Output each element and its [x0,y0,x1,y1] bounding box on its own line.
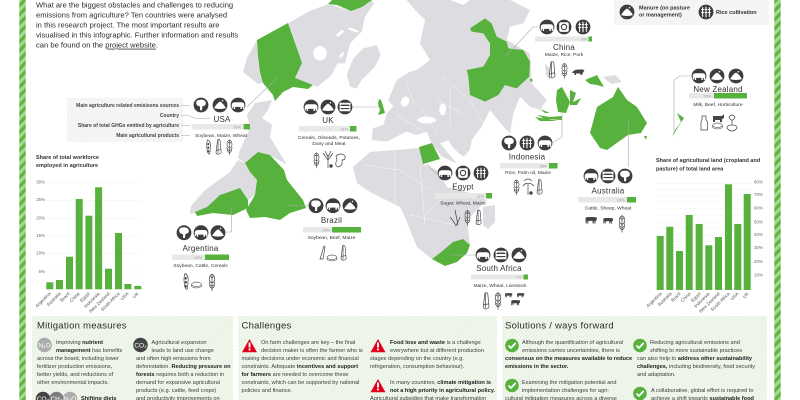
how-to-read key box: Country [160,113,179,119]
text: nutrient management: across the board, including lower [37,356,119,362]
chart: share of workforce in agriculture: 20% [36,216,45,220]
intro text: What are the biggest obstacles and challenges to reducing [36,1,233,10]
text: reducing pressure on forests: and often high emissions from [136,356,211,362]
country card: Indonesia: 15% [539,164,548,168]
country card: South Africa: 7% [516,276,522,280]
country card: China: China [553,43,575,52]
text: consensus: consensus on the measures available to reduce [505,356,632,362]
country card: Australia [578,120,636,232]
text: nutrient management: management has benefits [56,348,122,354]
chart: share of workforce in agriculture: 10% [36,250,45,256]
category labels: China [69,291,81,303]
category labels: Indonesia [693,291,711,309]
text: sustainability challenges [637,340,755,378]
country: Australia [590,87,647,150]
text: nutrient management: other environmental impacts. [37,380,109,386]
category labels: UK [132,291,140,299]
panel: mitigation measures [32,316,233,400]
chart: share of agricultural land: 70% [754,192,763,197]
country: Egypt [419,143,440,164]
chart: share of agricultural land: 20% [754,259,763,264]
text: reducing pressure on forests: products (e.g. cattle, feed crops) [136,388,216,394]
country card: Indonesia: Rice, Palm oil, Maize [505,170,551,176]
country card: Argentina: Argentina [182,244,219,253]
icon: warning triangle [370,339,386,352]
category labels: New Zealand [88,291,111,314]
text: sustainability challenges: shifting to more sustainable practices [650,348,742,354]
category labels [645,291,750,314]
country: New Zealand [672,113,684,137]
country card: Australia: Cattle, Sheep, Wheat [585,206,632,212]
chart: share of agricultural land: 40% [754,232,763,237]
bars [657,184,751,290]
intro text: can be found on the project website. [36,41,158,50]
text: on farm challenges [242,340,363,394]
text: on farm challenges: for farmers are needed to overcome these [242,372,348,378]
text: reducing pressure on forests: Agricultural expansion [152,340,207,346]
badges: CO2, CH4, N2O [36,392,77,400]
badge: CO2: CO₂ [134,342,147,350]
country card: Indonesia: Indonesia [509,152,546,162]
text: sustainability challenges: can also help to address other sustainability [637,356,753,362]
chart title: Share of agricultural land (cropland and [656,158,760,164]
icon: green check [633,339,647,352]
panel: solutions / ways forward [502,316,767,400]
category labels: Brazil [59,291,71,303]
chart title: pasture) of total land area [656,166,724,172]
text: on farm challenges: making decisions under economic and financial [242,356,359,362]
chart: share of agricultural land: 60% [754,206,763,210]
category labels: Australia [46,291,62,307]
country card: USA: Soybean, Maize, Wheat [195,133,248,139]
icon: green check [505,339,519,352]
country card: Australia: Australia [592,186,625,196]
text: food loss and waste: refrigeration, consumption behaviour). [370,364,465,370]
category labels: China [680,291,692,303]
text: reducing pressure on forests: leads to land use change [152,348,214,354]
country card: UK: Dairy and Meat [312,141,346,147]
chart: share of agricultural land [645,158,763,314]
chart: share of agricultural land: 80% [754,180,763,184]
legend label: rice: Rice cultivation [716,10,757,16]
country card: UK: 11% [341,127,349,131]
category labels: USA [729,291,740,301]
text: consensus: emissions carries uncertainties, there is [522,348,620,354]
country card: USA [192,78,277,155]
category labels: South Africa [710,291,731,312]
intro text [36,1,238,50]
country card: Brazil: Soybean, Beef, Maize [308,235,356,241]
badge: N2O: N₂O [38,342,51,350]
text: global effort [651,388,754,400]
text: reducing pressure on forests: forests requires both a reduction in [136,372,224,378]
left striped side border [19,0,26,400]
text: global effort: A collaborative, global effort is required to [651,388,754,394]
right striped side border [774,0,781,400]
category labels: Indonesia [83,291,101,309]
text: on farm challenges: decision maker is often the farmer who is [261,348,363,354]
how-to-read key box [67,98,210,142]
bars [46,187,141,289]
country card: China: Maize, Rice, Pork [545,52,584,58]
icon: green check [505,379,519,392]
category labels: USA [119,291,130,301]
panel: challenges [238,316,497,400]
country card: China [505,20,592,79]
country card: UK: Cereals, Oilseeds, Potatoes, [298,135,360,141]
grey landmasses [190,0,622,259]
world map [190,0,684,266]
text: food loss and waste [370,340,484,370]
country card: Brazil: 49% [322,228,331,232]
chart title: employed in agriculture [36,163,98,169]
chart: share of workforce in agriculture: 5% [39,269,45,274]
badge: N2O [37,338,52,352]
text: nutrient management [37,340,122,386]
country card: New Zealand: New Zealand [693,85,743,94]
country card: Brazil: Brazil [321,216,342,225]
country card: Egypt: Sugar, Wheat, Maize [440,200,486,206]
category labels: UK [742,291,750,299]
text: on farm challenges: constraints. Adequate incentives and support [242,364,358,370]
category labels: Australia [657,291,673,307]
text: sustainability challenges: and adaptation. [637,372,676,378]
category labels: Egypt [690,291,702,303]
country card: Egypt: 11% [477,194,485,198]
country card: China: 6% [582,38,588,42]
country card: Australia: 15% [617,198,625,202]
legend box [614,0,769,25]
country card: New Zealand: 50% [703,94,712,98]
country card: Argentina: 42% [194,256,203,260]
category labels: Argentina [34,291,52,309]
chart: share of agricultural land: 50% [754,220,763,224]
category labels: South Africa [100,291,121,312]
chart: share of workforce in agriculture: 30% [36,180,45,184]
text: on farm challenges: constraints, which can be supported by national [242,380,359,386]
icon: green check [633,387,647,400]
text: climate mitigation policy: In many countries, climate mitigation is [390,380,491,386]
text: food loss and waste: Food loss and waste is a challenge [390,340,481,346]
text: reducing pressure on forests [136,340,231,400]
country: USA [257,0,372,101]
country: Brazil [245,152,306,220]
country card: Egypt: Egypt [452,182,474,192]
text: consensus: emissions in the sector. [505,364,569,370]
chart: share of workforce in agriculture [34,155,141,314]
country card: South Africa: South Africa [476,264,522,273]
country card: Egypt [427,164,492,226]
chart title: Share of total workforce [36,155,99,161]
country: UK [378,99,385,115]
text: nutrient management: better yields, and reductions of [37,372,114,378]
category labels [34,291,140,314]
category labels: New Zealand [698,291,721,314]
how-to-read key box: Main agricultural products [116,133,179,139]
country: South Africa [432,239,470,266]
chart: share of agricultural land: 30% [754,245,763,250]
heading: mitigation measures: Mitigation measures [37,320,127,332]
country: Argentina [195,188,248,216]
country card: Brazil [287,198,361,261]
Eurasia and North America traced in a 3x local grid [288,0,550,163]
legend icon: rice [699,5,713,19]
heading: solutions: Solutions / ways forward [505,320,614,332]
badge: CO2 [133,338,148,352]
country card: South Africa: Maize, Wheat, Livestock [473,283,527,289]
text: consensus: Although the quantification of agricultural [522,340,623,346]
country card: Argentina: Soybean, Cattle, Cereals [173,263,228,269]
text: on farm challenges: policies and finance. [242,388,293,394]
text: sustainability challenges: challenges, including biodiversity, food security [637,364,755,370]
chart: share of workforce in agriculture: 15% [36,233,45,238]
country card: New Zealand: Milk, Beef, Horticulture [693,102,743,108]
country card: USA: 10% [233,125,242,129]
chart: share of agricultural land: 10% [754,272,763,278]
country card: UK [298,100,380,168]
chart: share of workforce in agriculture: 25% [36,197,45,202]
country: Indonesia [535,75,604,121]
text: sustainability challenges: Reducing agricultural emissions and [650,340,740,346]
text: on farm challenges: On farm challenges are key – the final [261,340,355,346]
icon: warning triangle [242,339,257,352]
highlighted countries [195,0,684,266]
text: reducing pressure on forests: deforestation. Reducing pressure on [136,364,231,370]
category labels: Brazil [670,291,682,303]
text: reducing pressure on forests: demand for expansive agricultural [136,380,220,386]
legend icon: manure [620,5,634,19]
heading: challenges: Challenges [242,320,292,332]
category labels: Argentina [645,291,663,309]
how-to-read key box: Main agriculture related emisisons sources [76,103,179,109]
text: examining potential: implementation challenges for agri- [522,388,609,394]
country: China [467,18,533,102]
country card: Argentina [172,207,232,291]
text: climate mitigation policy [370,380,495,400]
country card: South Africa [450,248,528,310]
text: climate mitigation policy: not a high priority in agricultural policy. [390,388,495,394]
text: food loss and waste: stages depending on the country (e.g. [370,356,464,362]
legend label: manure: or management) [639,12,682,18]
how-to-read key box: Share of total GHGs emitted by agriculture [78,123,179,129]
text: food loss and waste: everywhere but at different production [390,348,484,354]
intro text: emissions from agriculture? Ten countries were analysed [36,11,227,20]
intro text: in this research project. The most important results are [36,21,219,30]
text: nutrient management: fertilizer production emissions, [37,364,113,370]
text: examining potential [505,380,617,400]
country card: UK: UK [322,116,334,125]
text: nutrient management: Improving nutrient [56,340,103,346]
icon: warning triangle [370,379,386,392]
country card: New Zealand [674,69,747,135]
text: consensus [505,340,632,370]
country card: Indonesia [500,113,562,195]
country card: USA: USA [213,115,231,124]
legend label: manure: Manure (on pasture [639,6,690,12]
text: examining potential: Examining the mitigation potential and [522,380,617,386]
category labels: Egypt [79,291,91,303]
intro text: visualised in this infographic. Further information and results [36,31,238,40]
